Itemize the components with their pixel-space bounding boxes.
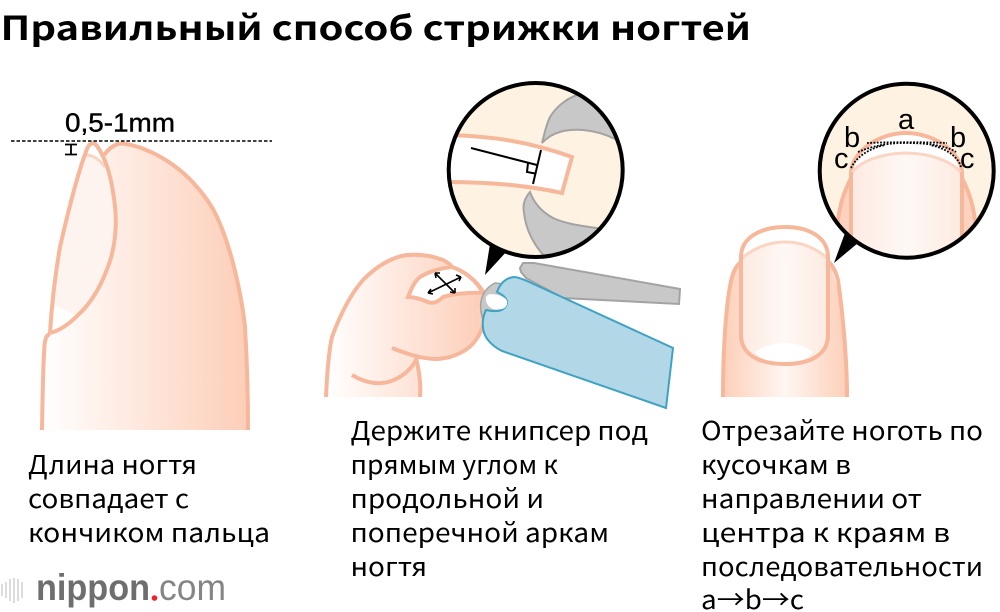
nail free edge [86, 143, 105, 167]
callout pointer [485, 244, 508, 275]
finger detail [836, 178, 977, 240]
clipper jaw top [541, 94, 616, 144]
caption: left: Длина ногтя [28, 445, 197, 482]
callout: right angle detail [440, 83, 640, 275]
illustration: finger side view [11, 108, 272, 430]
caption: left: кончиком пальца [28, 513, 270, 550]
caption: left [28, 445, 270, 550]
letters: a [898, 104, 915, 136]
lunula [50, 305, 77, 333]
clipper lever [520, 263, 680, 304]
nail white line [741, 242, 828, 259]
caption: middle: ногтя [350, 547, 427, 584]
nail [50, 143, 116, 333]
white nail tip [486, 294, 507, 309]
caption: right [701, 411, 983, 612]
caption: right: центра к краям в [701, 513, 950, 550]
clipper body [483, 277, 673, 408]
callout: cutting order: c [834, 143, 848, 175]
logo dot [152, 595, 157, 601]
caption: left: совпадает с [28, 479, 189, 516]
finger [326, 255, 484, 397]
measure label: 0,5-1mm [65, 108, 175, 138]
dotted cut lines [851, 142, 961, 168]
callout: cutting order: c [960, 143, 974, 175]
right angle lines [471, 148, 541, 184]
caption: middle: поперечной аркам [350, 513, 609, 550]
clipper jaw bottom [522, 190, 598, 255]
caption: right: кусочкам в [701, 445, 851, 482]
illustration: hand with clipper [326, 255, 680, 408]
callout: cutting order: b [950, 122, 966, 154]
caption: right: направлении от [701, 479, 922, 516]
logo mark [2, 578, 22, 603]
magnified nail [450, 138, 570, 190]
nail outline [50, 143, 116, 333]
logo suffix: com [159, 567, 226, 608]
caption: middle: Держите книпсер под [350, 411, 648, 448]
caption: right: Отрезайте ноготь по [701, 411, 983, 448]
caption: right: последовательности [701, 547, 983, 584]
nail [741, 227, 828, 364]
guide line [11, 140, 272, 142]
nail outline [741, 227, 828, 364]
caption: middle [350, 411, 648, 584]
arrows on nail [428, 273, 461, 294]
caption: middle: прямым углом к [350, 445, 559, 482]
measure bracket [65, 144, 77, 154]
callout: cutting order [820, 84, 994, 263]
title: Правильный способ стрижки ногтей [0, 2, 751, 50]
callout pointer [834, 233, 858, 263]
finger body [42, 143, 248, 430]
finger body [723, 262, 847, 397]
logo text: nippon [36, 567, 150, 608]
illustration: front view finger [723, 227, 847, 397]
clipper jaw tip [481, 283, 515, 325]
caption: middle: продольной и [350, 479, 544, 516]
lunula [755, 343, 813, 364]
logo: nippon.com [2, 567, 226, 608]
callout: cutting order: b [844, 122, 860, 154]
nail [408, 267, 483, 303]
